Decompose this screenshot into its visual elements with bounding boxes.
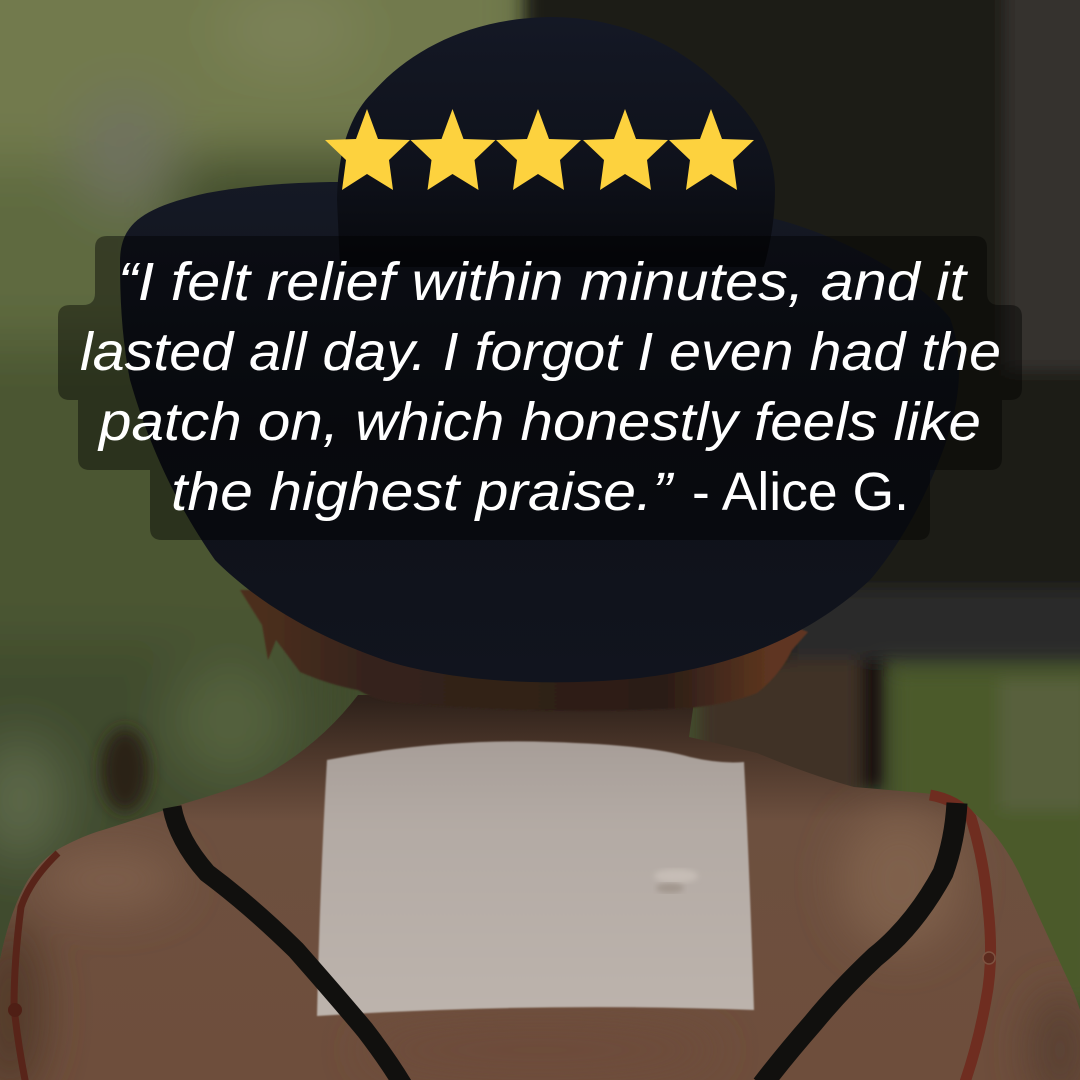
hat crown — [337, 17, 775, 267]
left strap buckle — [8, 1003, 22, 1017]
woman's back and shoulders — [0, 690, 1080, 1080]
hat — [120, 17, 959, 682]
testimonial quote — [80, 252, 1001, 522]
star 3 — [496, 109, 581, 190]
testimonial quote: “I felt relief within minutes, and it — [118, 252, 968, 312]
testimonial quote: lasted all day. I forgot I even had the — [80, 322, 1001, 382]
hat brim — [120, 182, 959, 682]
straps — [8, 795, 995, 1080]
five star rating — [325, 109, 754, 190]
testimonial quote: - Alice G. — [692, 462, 909, 522]
right black strap — [762, 803, 957, 1080]
quote highlight boxes — [58, 236, 1022, 540]
star 4 — [583, 109, 668, 190]
star 5 — [669, 109, 754, 190]
right strap buckle — [983, 952, 995, 964]
star 1 — [325, 109, 410, 190]
star 2 — [410, 109, 496, 190]
right red strap — [930, 795, 991, 1080]
left red strap — [14, 853, 58, 1080]
testimonial quote: the highest praise.” — [171, 462, 674, 522]
hair — [240, 590, 808, 711]
testimonial quote: patch on, which honestly feels like — [97, 392, 981, 452]
left black strap — [172, 807, 403, 1080]
neck patch — [317, 741, 754, 1016]
